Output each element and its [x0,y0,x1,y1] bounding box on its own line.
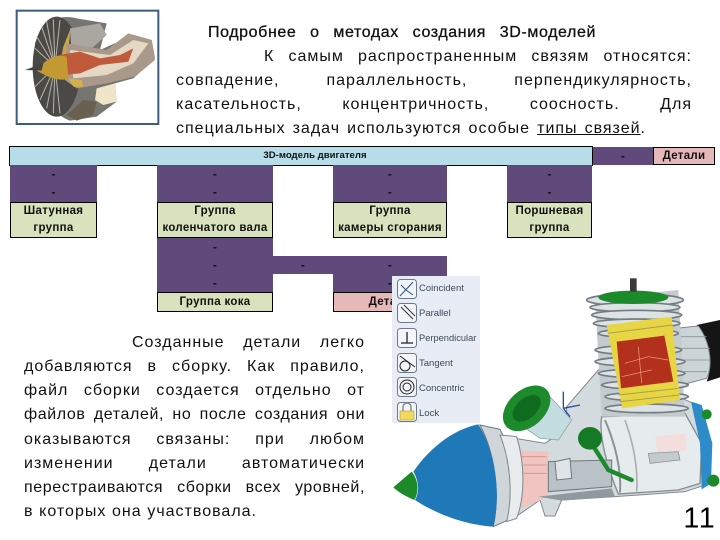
item: parallel: Parallel [419,308,451,319]
page number: 11 [683,502,716,534]
exhaust pipe [697,320,720,382]
text block: assembly [24,334,365,520]
node: connecting rod group: группа [33,222,74,234]
connector below crankshaft: - [213,276,217,290]
item: lock: Lock [419,408,439,419]
node: lower details [333,292,447,312]
text block: constraints [176,48,692,137]
title: Подробнее о методах создания 3D-моделей [208,24,596,41]
item: lock [398,402,439,422]
node: connecting rod group: Шатунная [24,205,83,217]
connector below crankshaft: - [213,240,217,254]
text block: assembly: изменении детали автоматически [24,455,365,472]
node: details: Детали [663,150,705,162]
text block: assembly: Созданные детали легко [132,334,365,351]
node: plug group [157,292,273,312]
connector column 2 [157,165,273,202]
connector column 4 [507,165,592,202]
connector to details: - [621,149,625,163]
node: piston group: группа [529,222,570,234]
connector column 3: - [388,167,392,181]
node: lower details: Детали [369,296,411,308]
node: connecting rod group [10,202,97,238]
item: coincident [398,280,464,298]
connector column 3: - [388,185,392,199]
text block: assembly: перестраиваются сборки всех уровней, [24,479,365,496]
connector below crankshaft [157,238,273,292]
item: coincident: Coincident [419,283,464,294]
connector horizontal [273,256,333,274]
cylinder liner [607,317,680,408]
illustration: engine model [393,278,720,534]
root node: engine 3D model: 3D-модель двигателя [263,150,367,161]
rear cover [691,402,712,489]
connector column 1 [10,165,97,202]
connector below crankshaft: - [213,258,217,272]
combustion chamber [617,336,673,388]
node: piston group [507,202,592,238]
item: tangent: Tangent [419,358,453,369]
root node: engine 3D model [9,146,593,166]
node: crankshaft group [157,202,273,238]
text block: assembly: файл сборки создается отдельно от [24,382,365,399]
connector column 4: - [547,167,552,181]
text block: constraints: К самым распространенным связям относятся: [264,48,692,65]
text block: assembly: добавляются в сборку. Как правило, [24,358,365,375]
connector column 1: - [51,167,56,181]
connector horizontal: - [301,258,305,272]
node: plug group: Группа кока [180,296,250,308]
text block: assembly: в которых она участвовала. [24,503,257,520]
spinner cone [413,424,497,527]
node: crankshaft group: коленчатого вала [162,222,268,234]
node: crankshaft group: Группа [194,205,236,217]
node: combustion chamber group [333,202,447,238]
needle valve [588,438,632,480]
axis marker [563,392,580,417]
item: concentric [398,378,465,396]
item: tangent [398,354,453,372]
item: parallel [398,304,451,322]
connector column 2: - [213,167,217,181]
panel: constraint types [392,276,480,423]
diagram: engine assembly tree [9,146,715,312]
spinner ring [480,425,515,527]
text block: constraints: специальных задач используются особые типы связей. [176,120,646,137]
connector column 4: - [547,185,552,199]
node: combustion chamber group: камеры сгорания [338,222,442,234]
text block: assembly: файлов деталей, но после создания они [24,406,365,423]
cylinder fins [595,290,685,417]
icon: jet engine cutaway picture [16,10,160,125]
node: combustion chamber group: Группа [369,205,411,217]
connector to lower details: - [388,276,392,290]
connector column 1: - [51,185,56,199]
item: concentric: Concentric [419,383,465,394]
connector column 3 [333,165,447,202]
connector to lower details [333,256,447,292]
cylinder head [598,291,668,304]
text block: constraints: касательность, концентричность, соосность. Для [176,96,692,113]
text block: constraints: совпадение, параллельность, перпендикулярность, [176,72,692,89]
spinner tip [393,472,417,500]
item: perpendicular [398,328,476,348]
node: details [653,147,715,165]
connector column 2: - [213,185,217,199]
crankcase [505,370,710,518]
connector to details [593,147,653,165]
connector to lower details: - [388,258,392,272]
node: piston group: Поршневая [516,205,583,217]
intake port [518,395,572,440]
text block: assembly: оказываются связаны: при любом [24,431,365,448]
item: perpendicular: Perpendicular [419,333,476,343]
